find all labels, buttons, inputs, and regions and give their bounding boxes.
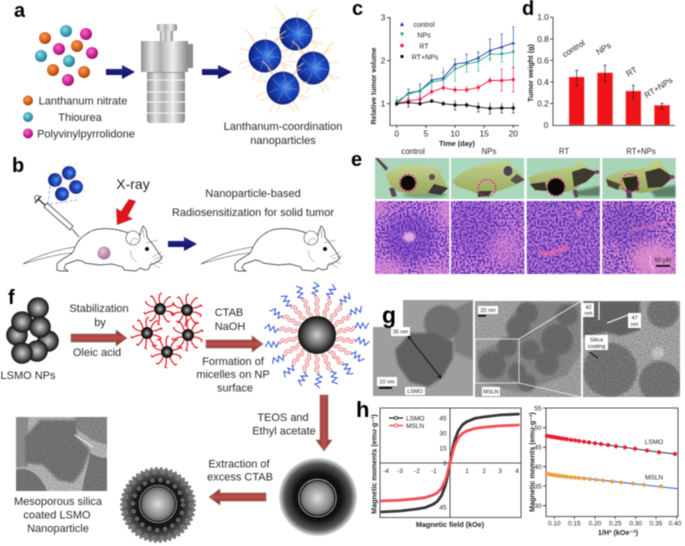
step 1 text: Oleic acid (73, 347, 121, 359)
hysteresis plot axes (380, 408, 521, 518)
hysteresis ticks: 45 (439, 504, 447, 512)
panel e: mouse photos and histology (351, 147, 679, 280)
saturation axis titles: Magnetic moments (emu·g⁻¹) (528, 412, 536, 512)
title line 1: Nanoparticle-based (205, 188, 301, 200)
tick labels: 10 (450, 128, 460, 138)
saturation ticks: 0.30 (629, 520, 642, 528)
micelle particle (264, 282, 370, 388)
column headers: RT+NPs (626, 147, 656, 156)
axis title: Tumor weight (g) (526, 44, 535, 102)
step 3 text (252, 412, 316, 438)
hysteresis ticks: 4 (515, 468, 519, 475)
TEM micrograph inset (15, 416, 108, 492)
zoomed annotations: coating (588, 344, 605, 350)
saturation ticks (534, 406, 682, 528)
tick labels (537, 12, 549, 130)
tick labels: 0.4 (537, 77, 549, 87)
series labels: MSLN (645, 474, 663, 482)
line: control (397, 43, 513, 104)
tick labels: 20 (509, 128, 518, 138)
error bars (575, 65, 664, 109)
column headers (401, 147, 656, 156)
step 3 text: TEOS and (257, 412, 309, 424)
panel f: synthesis scheme (0, 282, 370, 542)
step 2 text: surface (217, 382, 253, 394)
product caption line 2: nanoparticles (250, 135, 316, 147)
x-ray label: X-ray (116, 176, 150, 192)
panel c: tumor volume chart (352, 0, 519, 148)
tick labels: 0.6 (537, 56, 549, 66)
column headers: NPs (482, 147, 496, 156)
photo: RT (526, 158, 601, 200)
saturation ticks: 0.15 (568, 520, 581, 528)
column headers: RT (559, 147, 569, 156)
saturation ticks: 35 (534, 484, 542, 490)
hysteresis ticks: 0 (443, 460, 447, 468)
line: NPs (397, 52, 513, 102)
LSMO annotations: LSMO (407, 389, 424, 395)
axes (387, 17, 519, 128)
rotated bar labels: NPs (594, 40, 613, 57)
panel a: synthesis (14, 0, 342, 147)
tick labels: 0.8 (537, 34, 549, 44)
legend (400, 22, 439, 62)
photo: control (374, 157, 450, 200)
scale bar: 50 μM (655, 258, 671, 264)
axes (550, 17, 675, 125)
line: RT+NPs (397, 101, 513, 108)
step 1 text: by (94, 317, 106, 329)
saturation ticks: 40 (534, 464, 542, 471)
MSLN points (547, 474, 661, 486)
arrow (209, 489, 266, 505)
hysteresis axis titles (370, 414, 485, 529)
saturation ticks: 55 (534, 406, 542, 412)
saturation ticks: 45 (534, 444, 542, 452)
syringe (34, 196, 79, 237)
rotated bar labels: control (560, 38, 587, 59)
saturation ticks: 0.10 (548, 520, 561, 528)
line: RT (397, 80, 513, 104)
panel h: magnetic charts (356, 397, 682, 537)
arrow (71, 330, 127, 346)
legend: RT (419, 44, 429, 50)
legend: Thiourea (58, 112, 103, 124)
panel b: radiosensitization (12, 155, 342, 271)
nanoparticles (238, 7, 340, 113)
legend: NPs (417, 32, 431, 40)
label g: g (382, 302, 396, 328)
label e: e (351, 149, 362, 171)
step 4 text: excess CTAB (207, 472, 273, 484)
MSLN fit line (546, 474, 678, 489)
hysteresis ticks: 45 (439, 416, 447, 422)
step 2 text: NaOH (215, 321, 245, 333)
title line 2: Radiosensitization for solid tumor (172, 207, 334, 219)
silica coated sphere (279, 458, 357, 536)
step 2 text (196, 307, 270, 394)
legend: RT+NPs (412, 54, 439, 62)
histology: control (374, 200, 450, 275)
tick labels: 1.0 (537, 12, 549, 22)
hysteresis legend (389, 416, 424, 430)
oleic acid coated particles (131, 293, 203, 368)
rotated bar labels: RT (624, 64, 639, 79)
tick labels: 3 (381, 12, 386, 22)
zoomed annotations: 47 (631, 316, 638, 322)
LSMO particle cluster (6, 298, 58, 364)
step 4 text (207, 458, 273, 484)
hysteresis ticks: 30 (439, 430, 447, 438)
legend: Polyvinylpyrrolidone (37, 128, 135, 140)
step 1 text: Stabilization (69, 303, 129, 315)
arrow (316, 395, 332, 451)
saturation ticks: 0.40 (669, 520, 682, 528)
caption: Nanoparticle (27, 523, 89, 535)
step 2 text: Formation of (202, 356, 265, 368)
saturation axis titles (528, 412, 639, 537)
tick labels: 0 (394, 128, 399, 138)
step 2 text: CTAB (215, 307, 243, 319)
series labels (645, 439, 663, 482)
legend: Lanthanum nitrate (39, 96, 127, 108)
zoomed annotations: nm (585, 311, 593, 317)
panel g: TEM images (373, 296, 681, 403)
tick labels: 5 (424, 128, 429, 138)
tick labels: 2 (381, 56, 386, 66)
tick labels: 0 (544, 120, 549, 130)
saturation ticks: 30 (534, 503, 542, 510)
label a: a (14, 0, 26, 22)
saturation ticks: 50 (534, 425, 542, 432)
zoomed annotations: 42 (585, 305, 592, 311)
label h: h (356, 397, 369, 422)
series labels: LSMO (645, 439, 663, 446)
autoclave (141, 24, 193, 123)
histology: NPs (450, 200, 526, 275)
tick labels: 15 (480, 128, 489, 138)
hysteresis axis titles: Magnetic field (kOe) (416, 520, 485, 529)
product caption: Lanthanum-coordination (224, 121, 342, 133)
step 1 text (69, 303, 129, 359)
zoomed annotations: nm (631, 322, 639, 328)
precursor molecules (35, 25, 98, 86)
arrow (206, 336, 263, 352)
saturation ticks: 0.35 (650, 520, 663, 528)
injected particles (44, 162, 87, 204)
LSMO label: LSMO NPs (0, 370, 56, 382)
hysteresis ticks: 3 (498, 468, 502, 475)
hysteresis legend: LSMO (406, 416, 424, 422)
TEM: zoomed MSLN (582, 300, 681, 398)
saturation ticks: 0.25 (609, 520, 622, 528)
photo: NPs (450, 158, 526, 200)
MSLN annotations (475, 301, 581, 397)
label f: f (8, 287, 15, 309)
x-ray arrow (116, 199, 136, 225)
arrow (168, 237, 197, 251)
hysteresis ticks: -4 (383, 468, 389, 475)
TEM: MSLN (474, 300, 582, 398)
hysteresis ticks: 2 (482, 468, 486, 475)
arrow (202, 65, 232, 79)
zoomed annotations (583, 302, 641, 358)
LSMO fit line (547, 436, 675, 454)
tick labels: 1 (381, 98, 386, 108)
zoomed annotations: Silica (590, 338, 604, 344)
panel d: tumor weight chart (522, 0, 675, 130)
error bars (397, 27, 515, 114)
step 2 text: micelles on NP (196, 369, 270, 381)
label b: b (12, 155, 24, 177)
axis title x: Time (day) (439, 139, 476, 148)
MSLN curve (380, 425, 520, 501)
LSMO annotations (377, 327, 441, 395)
mouse with tumor (23, 226, 164, 271)
MSLN annotations: MSLN (483, 390, 499, 396)
hysteresis ticks: -3 (397, 468, 403, 475)
hysteresis ticks: -1 (431, 468, 437, 475)
step 4 text: Extraction of (208, 458, 271, 470)
caption: Mesoporous silica (14, 496, 103, 508)
caption: coated LSMO (23, 510, 91, 522)
LSMO curve (380, 414, 520, 512)
MSLN annotations: 20 nm (480, 308, 496, 314)
rotated bar labels (560, 38, 674, 100)
LSMO annotations: 10 nm (379, 380, 395, 386)
hysteresis ticks (383, 416, 519, 512)
hysteresis axis titles: Magnetic moments (emu·g⁻¹) (370, 414, 378, 514)
TEM: LSMO (372, 299, 474, 396)
saturation plot axes (543, 408, 678, 519)
tick labels (381, 12, 518, 138)
LSMO annotations: 35 nm (393, 330, 409, 336)
bars (569, 73, 670, 125)
hysteresis ticks: 1 (465, 468, 469, 475)
mesoporous sphere (122, 468, 194, 542)
rotated bar labels: RT+NPs (642, 75, 674, 100)
hysteresis legend: MSLN (406, 423, 424, 430)
tick labels: 0.2 (537, 98, 549, 108)
arrow (106, 65, 135, 79)
hysteresis ticks: 15 (439, 446, 447, 452)
column headers: control (401, 147, 425, 156)
histology: RT+NPs (601, 200, 676, 275)
saturation axis titles: 1/H² (kOe⁻²) (598, 528, 639, 537)
scale bar (655, 258, 671, 267)
photo: RT+NPs (602, 158, 676, 200)
hysteresis ticks: -2 (414, 468, 420, 475)
legend: control (413, 22, 435, 29)
axis title y: Relative tumor volume (369, 47, 378, 125)
treated mouse (201, 226, 342, 271)
saturation ticks: 0.20 (589, 520, 602, 528)
legend (23, 96, 135, 140)
caption (14, 496, 103, 535)
histology: RT (526, 200, 601, 275)
step 3 text: Ethyl acetate (252, 426, 316, 438)
